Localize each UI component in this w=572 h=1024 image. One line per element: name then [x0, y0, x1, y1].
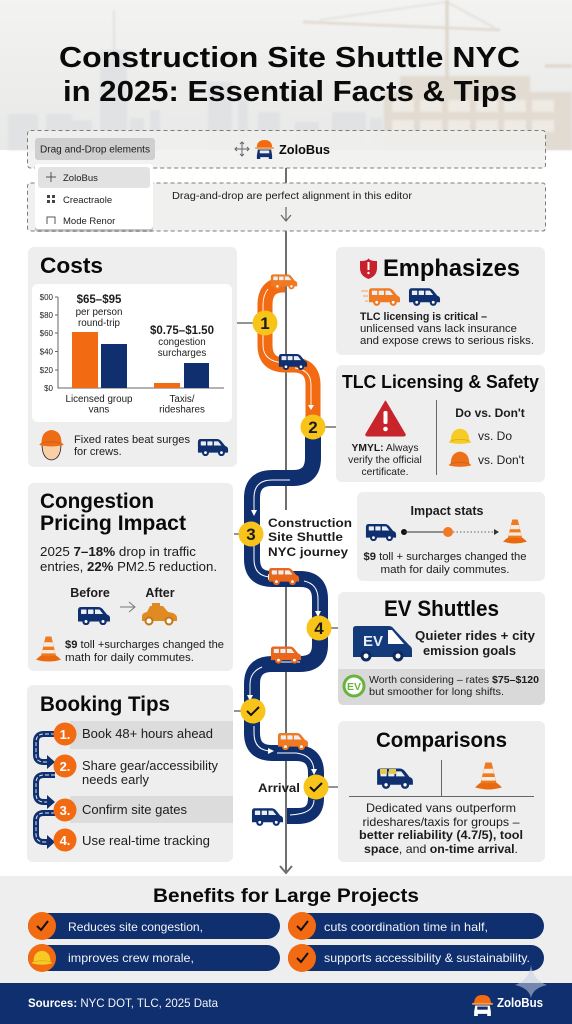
- title: in 2025: Essential Facts & Tips: [63, 76, 517, 108]
- rates band: EV: [347, 681, 361, 693]
- brand name: ZoloBus: [279, 143, 330, 157]
- benefit: congestion: [28, 912, 280, 940]
- step marker 1: [252, 310, 278, 336]
- dropdown menu: Creactraole: [63, 195, 112, 206]
- step marker 3: [238, 522, 264, 546]
- heading: Booking Tips: [40, 693, 170, 716]
- heading: Comparisons: [376, 729, 507, 752]
- section: benefits: [0, 876, 572, 983]
- heading: EV Shuttles: [384, 596, 499, 621]
- rates band: Worth considering – rates $75–$120: [369, 675, 539, 686]
- panel: comparisons: [338, 721, 545, 862]
- heading: Impact stats: [411, 504, 484, 518]
- step 2: needs early: [82, 773, 150, 787]
- benefit: morale: improves crew morale,: [68, 951, 194, 965]
- icon: navy van: [409, 288, 440, 305]
- YMYL note: verify the official: [348, 455, 422, 466]
- icon: move: [235, 142, 249, 156]
- body text: space, and on-time arrival .: [364, 842, 518, 856]
- do and don't list: Do vs. Don't: [455, 406, 525, 420]
- YMYL note: YMYL: Always: [352, 443, 418, 454]
- do and don't list: vs. Don't: [478, 453, 525, 467]
- editor bar: alignment row: Drag-and-drop are perfect alignment in this editor: [172, 190, 413, 202]
- bar chart: $20: [40, 366, 54, 375]
- body text: better reliability (4.7/5), tool: [359, 828, 523, 842]
- icon: speeding van: [361, 288, 400, 305]
- panel: impact stats: [357, 492, 545, 581]
- center timeline line: [280, 168, 292, 873]
- heading: TLC: TLC Licensing & Safety: [342, 372, 539, 392]
- bar chart: per person: [76, 307, 122, 318]
- header skyline background: [0, 0, 572, 150]
- icon: ZoloBus logo: [255, 140, 274, 159]
- icon: cone: [36, 636, 61, 662]
- sparkle: [515, 965, 547, 998]
- arrival label: Arrival: [258, 781, 300, 795]
- bar chart: [32, 284, 232, 422]
- step 1: 1.: [60, 727, 70, 742]
- bar chart: $40: [40, 348, 54, 356]
- editor button: Drag and-Drop elements: [40, 144, 150, 156]
- step 2: 2.: [60, 759, 70, 774]
- stats text: entries, 22% PM2.5 reduction.: [40, 560, 217, 574]
- highlight bands: [70, 721, 233, 823]
- YMYL note: certificate.: [362, 467, 408, 478]
- toll note: math for daily commutes.: [65, 652, 194, 664]
- step 4: [54, 828, 210, 852]
- body text: TLC licensing is critical –: [360, 311, 487, 323]
- sources: Sources: NYC DOT, TLC, 2025 Data: [28, 996, 218, 1010]
- divider: [349, 760, 534, 796]
- body text: Dedicated vans outperform: [366, 801, 516, 815]
- bar chart: $80: [40, 311, 54, 320]
- heading: emphasizes: Emphasizes: [383, 255, 520, 282]
- heading: Benefits for Large Projects: [153, 886, 419, 907]
- journey label: NYC journey: [268, 545, 348, 559]
- bar chart: $0: [44, 384, 54, 393]
- YMYL note: [348, 443, 422, 478]
- step 4: 4.: [60, 833, 70, 848]
- route vans: [252, 274, 308, 825]
- step 3: Confirm site gates: [82, 803, 187, 817]
- bar chart: rideshares: [159, 404, 205, 416]
- toll note: [65, 639, 224, 664]
- step 2: Share gear/accessibility: [82, 759, 219, 773]
- panel: booking tips: [27, 685, 233, 862]
- bar chart: Taxis/: [169, 394, 195, 405]
- toll note: $9 toll +surcharges changed the: [65, 639, 224, 651]
- do and don't list: [449, 406, 525, 467]
- panel: costs: [28, 247, 237, 467]
- benefit: coordination: [288, 912, 544, 940]
- step 2: [54, 754, 219, 787]
- step 4: Use real-time tracking: [82, 834, 210, 848]
- icon: van: [377, 769, 413, 788]
- body text: rideshares/taxis for groups –: [362, 815, 520, 829]
- icon: worker: [40, 430, 64, 460]
- bar chart: vans: [89, 404, 109, 416]
- brand name: ZoloBus: [497, 996, 543, 1010]
- benefit: coordination: cuts coordination time in half,: [324, 920, 488, 934]
- bar chart: congestion: [158, 337, 206, 348]
- icon: cone: [475, 762, 502, 790]
- icon: EV van: EV: [363, 633, 383, 650]
- benefit: morale: [28, 944, 280, 972]
- step 3: 3.: [60, 803, 70, 818]
- step marker 2: [300, 414, 326, 440]
- bar chart: round-trip: [78, 318, 121, 329]
- icon: warning triangle: [366, 401, 405, 436]
- step marker 2: 2: [308, 418, 318, 437]
- body text: and expose crews to serious risks.: [360, 335, 534, 347]
- tagline: [415, 628, 536, 658]
- bar chart: $0.75–$1.50: [150, 325, 214, 337]
- panel: emphasizes: [336, 247, 545, 355]
- tagline: emission goals: [423, 643, 516, 658]
- journey label: Site Shuttle: [268, 530, 343, 544]
- tagline: Quieter rides + city: [415, 628, 536, 643]
- benefit: sustainability: [288, 944, 544, 972]
- editor bar: logo row: [28, 130, 546, 168]
- heading: costs: Costs: [40, 253, 103, 278]
- step 3: [54, 798, 187, 822]
- step 1: Book 48+ hours ahead: [82, 727, 213, 741]
- note: fixed rates: for crews.: [74, 446, 122, 458]
- note: [364, 551, 527, 576]
- panel: TLC licensing and safety: [336, 365, 545, 482]
- before and after: After: [145, 586, 175, 600]
- check marker: [240, 698, 266, 724]
- stats text: [40, 545, 217, 574]
- dropdown menu: [35, 164, 153, 232]
- rates band: [338, 669, 545, 705]
- step marker 4: 4: [314, 619, 324, 638]
- note: fixed rates: [74, 434, 190, 458]
- bar chart: Licensed group: [66, 394, 133, 405]
- icon: EV van: [353, 626, 412, 660]
- divider: [436, 400, 438, 475]
- title: Construction Site Shuttle NYC: [59, 42, 520, 74]
- bar chart: $00: [40, 293, 54, 302]
- icon: navy van: [198, 439, 228, 455]
- bar chart: surcharges: [158, 348, 206, 359]
- icon: shield: [360, 258, 377, 279]
- icon: footer logo: [472, 995, 493, 1016]
- journey label: Construction: [268, 516, 352, 530]
- body text: [360, 311, 534, 347]
- benefit: congestion: Reduces site congestion,: [68, 920, 203, 934]
- heading: congestion: Congestion: [40, 490, 154, 513]
- heading: congestion: Pricing Impact: [40, 512, 186, 535]
- progress line: [401, 527, 499, 537]
- stats text: 2025 7–18% drop in traffic: [40, 545, 196, 559]
- editor button: [35, 138, 155, 160]
- bar chart: $60: [40, 329, 54, 338]
- note: fixed rates: Fixed rates beat surges: [74, 434, 190, 446]
- step marker 1: 1: [260, 314, 270, 333]
- step 1: [54, 722, 213, 746]
- do and don't list: vs. Do: [478, 429, 512, 443]
- body text: unlicensed vans lack insurance: [360, 323, 517, 335]
- panel: congestion pricing impact: [28, 483, 233, 671]
- before and after: [70, 586, 177, 624]
- note: $9 toll + surcharges changed the: [364, 551, 527, 563]
- before and after: Before: [70, 586, 110, 600]
- step marker 4: [306, 616, 332, 640]
- dropdown menu: Mode Renor: [63, 216, 115, 227]
- bar chart: $65–$95: [77, 294, 122, 306]
- step marker 3: 3: [246, 525, 256, 544]
- dropdown menu: ZoloBus: [63, 173, 98, 184]
- icon: cone: [503, 520, 527, 544]
- connector lines: [234, 323, 338, 787]
- footer: [0, 965, 572, 1024]
- heading: congestion: [40, 490, 186, 535]
- rates band: but smoother for long shifts.: [369, 687, 504, 698]
- arrival marker: [304, 774, 328, 800]
- editor bar: alignment row: [28, 183, 546, 231]
- panel: EV shuttles: [338, 592, 545, 705]
- title: [59, 42, 520, 108]
- journey label: [268, 516, 352, 559]
- icon: van: [366, 524, 396, 540]
- route road: [247, 285, 321, 816]
- body text: [359, 801, 523, 856]
- step connectors: [36, 734, 55, 849]
- note: math for daily commutes.: [380, 564, 510, 576]
- benefit: sustainability: supports accessibility & sustainability.: [324, 951, 530, 965]
